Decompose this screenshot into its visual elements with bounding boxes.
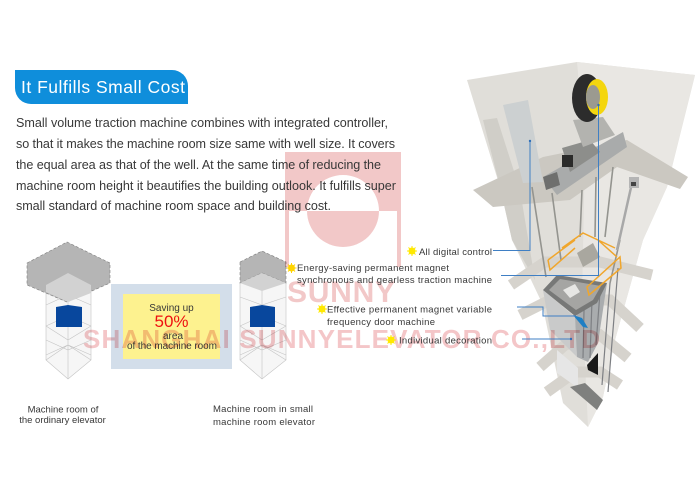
callout: all digital control: All digital control [419, 247, 492, 258]
heading badge [15, 70, 188, 104]
watermark: company name: SHANGHAI SUNNYELEVATOR CO.,LTD [83, 324, 600, 354]
elevator shaft illustration [467, 62, 695, 427]
callout: individual decoration: Individual decoration [399, 336, 492, 346]
body paragraph: so that it makes the machine room size same with well size. It covers [16, 137, 395, 151]
saving panel: area [163, 331, 183, 342]
saving panel: Saving up [149, 303, 194, 314]
door machine [573, 315, 588, 328]
callout: individual decoration [386, 335, 572, 346]
machine floor slab [473, 140, 688, 207]
caption: small machine room elevator [213, 404, 315, 428]
guide rails [532, 167, 620, 283]
lower panel [557, 350, 578, 388]
diagram: ordinary elevator machine room [27, 242, 110, 379]
saving panel: of the machine room [127, 341, 217, 352]
caption: ordinary elevator: the ordinary elevator [19, 415, 106, 426]
body paragraph: Small volume traction machine combines with integrated controller, [16, 116, 388, 130]
callout: traction machine: synchronous and gearless traction machine [297, 275, 492, 286]
control box [577, 243, 600, 267]
body paragraph: the equal area as that of the well. At the same time of reducing the [16, 158, 381, 172]
callout: traction machine [286, 104, 600, 286]
watermark: Sunny logo [285, 152, 401, 309]
car walls [543, 290, 577, 357]
caption: ordinary elevator [19, 404, 106, 426]
saving panel: 50% [154, 312, 189, 331]
caption: small machine room elevator: Machine room in small [213, 404, 313, 415]
body paragraph: machine room height it beautifies the building outlook. It fulfills super [16, 179, 396, 193]
caption: ordinary elevator: Machine room of [28, 404, 99, 416]
body paragraph: small standard of machine room space and building cost. [16, 199, 331, 213]
watermark: Sunny logo: SUNNY [287, 276, 395, 309]
callout: door machine: Effective permanent magnet variable [327, 304, 492, 316]
machine bed [543, 132, 627, 195]
floor slabs [511, 262, 652, 392]
position sensor post [617, 183, 632, 250]
callout: traction machine: Energy-saving permanent magnet [297, 263, 449, 274]
callout: all digital control [407, 140, 531, 258]
diagram: small machine room elevator [240, 251, 286, 379]
caption: small machine room elevator: machine room elevator [213, 417, 315, 428]
heading badge: It Fulfills Small Cost [21, 77, 185, 97]
body paragraph [16, 116, 396, 213]
car roof [543, 275, 607, 316]
counterweight [503, 100, 543, 183]
saving panel [111, 284, 232, 369]
car top orange frame [548, 233, 621, 295]
traction machine [572, 74, 602, 122]
callout: door machine: frequency door machine [327, 317, 435, 328]
callout: door machine [317, 304, 576, 328]
